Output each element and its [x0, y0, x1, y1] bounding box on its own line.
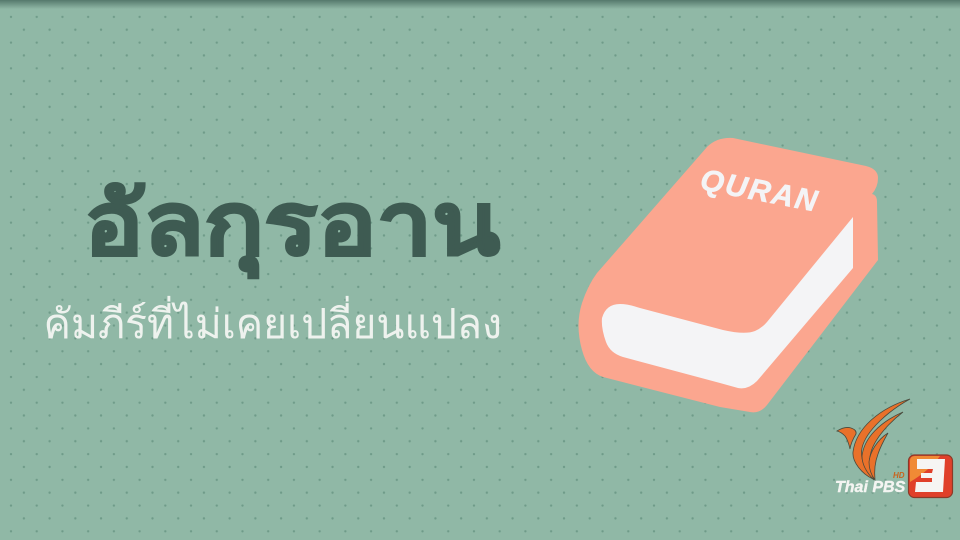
book label: QURAN	[698, 163, 822, 219]
logo: Thai PBS 3	[835, 399, 952, 498]
title: อัลกุรอาน	[84, 176, 500, 273]
logo bird	[837, 399, 910, 480]
subtitle: คัมภีร์ที่ไม่เคยเปลี่ยนแปลง	[44, 301, 502, 347]
logo HD mark: HD	[893, 471, 905, 480]
book pages	[602, 217, 853, 388]
logo text: Thai PBS	[835, 479, 906, 496]
logo 3 badge	[908, 455, 952, 498]
icon: Quran book	[578, 138, 878, 412]
book cover	[578, 138, 878, 412]
